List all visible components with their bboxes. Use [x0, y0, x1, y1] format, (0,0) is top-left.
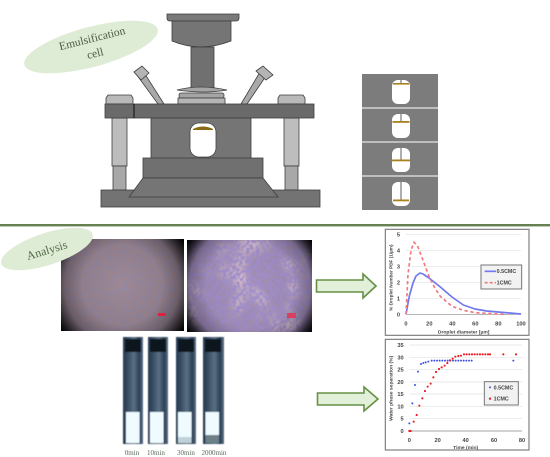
legend: 0.5CMC — [494, 385, 513, 391]
sequence frame 1 — [362, 74, 438, 108]
x axis labels — [408, 438, 525, 444]
observation window — [190, 123, 216, 157]
label: Analysis: Analysis — [25, 237, 69, 263]
arrow to separation chart — [318, 387, 378, 411]
series 0.5CMC — [409, 361, 513, 423]
y axis labels: 5 — [401, 417, 404, 423]
axis titles: Time (min) — [453, 445, 479, 451]
legend: 1CMC — [497, 281, 512, 287]
left support bolt — [106, 95, 133, 190]
label: Emulsification cell: cell — [86, 46, 105, 62]
right angled bolt — [241, 66, 273, 104]
chart: droplet number PDF: % Droplet Number PDF (1/µm) — [389, 244, 394, 311]
x axis labels: 80 — [519, 438, 525, 444]
y axis labels: 15 — [397, 392, 404, 398]
cuvette 2000min — [203, 337, 224, 444]
cuvette 10min — [148, 337, 168, 444]
cuvette 0min — [123, 337, 143, 444]
legend — [484, 382, 518, 405]
y axis labels: 30 — [397, 355, 404, 361]
y axis labels: 1 — [397, 296, 400, 302]
x axis labels: 40 — [449, 322, 455, 328]
sequence frame 2 — [362, 108, 438, 142]
y axis labels: 2 — [397, 280, 400, 286]
x axis labels: 20 — [435, 438, 441, 444]
y axis labels: 0 — [401, 429, 404, 435]
foot plate — [101, 190, 320, 207]
x axis labels: 100 — [516, 322, 526, 328]
y axis labels — [397, 232, 401, 318]
x axis labels: 40 — [463, 438, 469, 444]
label: Emulsification cell — [19, 10, 163, 84]
sequence frame 3 — [362, 142, 438, 176]
cuvette time labels: 10min — [147, 449, 165, 457]
cuvette photos — [123, 337, 227, 457]
label: Analysis — [0, 219, 98, 279]
y axis labels: 25 — [397, 368, 404, 374]
sequence frame 4 — [362, 176, 438, 210]
base block — [143, 158, 263, 178]
emulsification cell apparatus — [101, 14, 320, 207]
axis titles: Droplet diameter [µm] — [438, 330, 490, 336]
legend: 1CMC — [494, 397, 509, 403]
cell time-sequence panels — [362, 74, 438, 210]
chart: droplet number PDF — [385, 229, 529, 336]
micrograph: 1CMC — [187, 240, 312, 332]
right support bolt — [278, 95, 305, 190]
gridlines — [409, 345, 522, 419]
x axis labels — [404, 322, 526, 328]
x axis labels: 0 — [404, 322, 408, 328]
series 0.5CMC — [406, 273, 521, 314]
x axis labels: 20 — [426, 322, 432, 328]
legend — [481, 265, 522, 289]
central body — [151, 118, 251, 159]
series 1CMC — [409, 354, 516, 431]
label: Emulsification cell: Emulsification — [58, 25, 127, 53]
cuvette time labels — [125, 449, 227, 457]
top plate — [105, 104, 314, 118]
y axis labels: 35 — [397, 343, 404, 349]
section divider — [0, 224, 550, 226]
arrow to droplet chart — [316, 274, 376, 298]
bellows — [177, 87, 227, 104]
gridlines — [406, 234, 521, 298]
x axis labels: 80 — [495, 322, 501, 328]
y axis labels: 5 — [397, 232, 400, 238]
x axis labels: 60 — [491, 438, 497, 444]
cuvette time labels: 0min — [125, 449, 140, 457]
y axis labels: 10 — [397, 404, 404, 410]
press cup — [172, 21, 231, 47]
y axis labels — [397, 343, 404, 435]
y axis labels: 0 — [397, 312, 400, 318]
cuvette 30min — [176, 337, 196, 444]
y axis labels: 4 — [397, 248, 401, 254]
chart: water phase separation: Water phase separation (%) — [389, 355, 395, 421]
trapezoid base — [129, 178, 278, 197]
y axis labels: 3 — [397, 264, 400, 270]
x axis labels: 0 — [408, 438, 411, 444]
cuvette time labels: 30min — [177, 449, 195, 457]
micrograph: 0.5CMC — [61, 239, 184, 331]
chart: water phase separation — [385, 339, 529, 451]
press cap — [167, 14, 239, 21]
x axis labels: 60 — [472, 322, 478, 328]
legend: 0.5CMC — [497, 269, 516, 275]
y axis labels: 20 — [397, 380, 404, 386]
press stem — [191, 47, 214, 88]
left angled bolt — [134, 66, 164, 104]
series 1CMC — [406, 242, 504, 314]
cuvette time labels: 2000min — [202, 449, 227, 457]
